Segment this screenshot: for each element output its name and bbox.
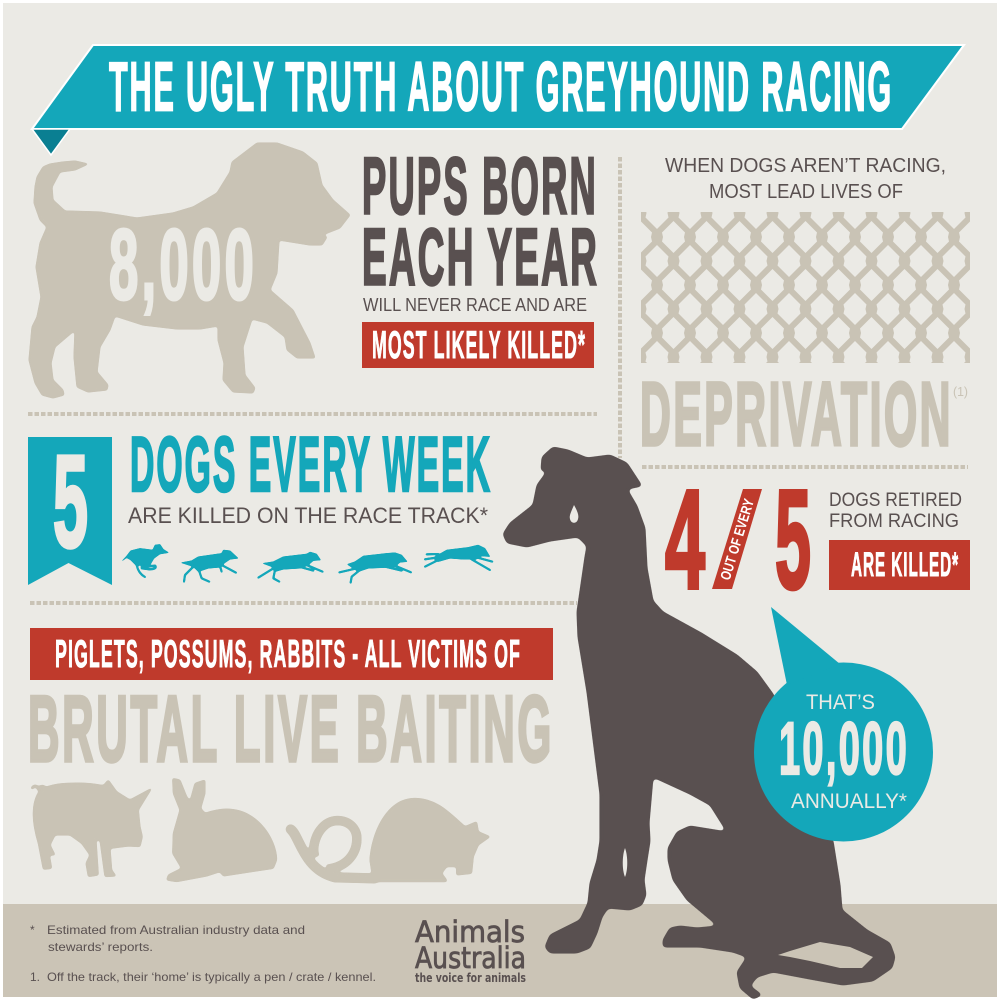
statistic: 4 out of every 5 xyxy=(665,460,811,618)
speech bubble: 10,000 annually: ANNUALLY* xyxy=(791,790,907,813)
icons: running greyhounds xyxy=(122,544,492,583)
text: DOGS EVERY WEEK xyxy=(130,420,492,508)
text: PUPS BORN xyxy=(362,142,598,232)
footnotes xyxy=(30,923,376,984)
statistic: 4 out of every 5: 4 xyxy=(665,460,705,618)
text: are killed on the race track: ARE KILLED ON THE RACE TRACK* xyxy=(128,503,488,528)
statistic: 4 out of every 5: OUT OF EVERY xyxy=(718,497,758,582)
footnotes: 1. xyxy=(30,970,40,984)
footnotes: Off the track, their ‘home’ is typically a pen / crate / kennel. xyxy=(47,970,376,984)
red label: are killed xyxy=(829,540,970,590)
red label: most likely killed xyxy=(362,322,594,368)
text: MOST LIKELY KILLED* xyxy=(372,324,586,367)
title banner xyxy=(32,45,964,155)
text: dogs retired from racing: FROM RACING xyxy=(829,511,959,532)
logo: Animals Australia: Australia xyxy=(415,941,526,975)
speech bubble: 10,000 annually: THAT’S xyxy=(806,691,875,714)
logo: Animals Australia: Animals xyxy=(415,915,525,949)
logo: Animals Australia xyxy=(415,915,526,985)
speech bubble: 10,000 annually xyxy=(754,607,933,842)
number 8,000: 8,000 xyxy=(109,209,257,321)
text: EACH YEAR xyxy=(362,212,599,302)
logo: Animals Australia: the voice for animals xyxy=(415,971,526,985)
icon: tear xyxy=(570,505,578,523)
text: when dogs aren't racing xyxy=(665,155,946,203)
text: will never race: WILL NEVER RACE AND ARE xyxy=(363,295,587,315)
icons: pig, rabbit, possum xyxy=(32,778,490,882)
footnotes: Estimated from Australian industry data and xyxy=(47,923,305,937)
text: dogs retired from racing xyxy=(829,490,962,532)
ribbon: 5 xyxy=(28,428,112,585)
ribbon: 5: 5 xyxy=(53,428,88,574)
heading: pups born each year xyxy=(362,142,599,302)
puppy silhouette with 8,000 xyxy=(29,143,350,398)
text: when dogs aren't racing: MOST LEAD LIVES OF xyxy=(709,181,903,203)
ground band xyxy=(3,904,997,997)
dotted dividers xyxy=(28,157,968,603)
text: dogs retired from racing: DOGS RETIRED xyxy=(829,490,962,511)
footnotes: * xyxy=(30,923,35,937)
text: 5 xyxy=(775,460,811,618)
icon: chain-link fence xyxy=(641,212,970,363)
text: when dogs aren't racing: WHEN DOGS AREN’T RACING, xyxy=(665,155,946,177)
footnotes: stewards’ reports. xyxy=(48,940,153,954)
red label: all victims of xyxy=(30,628,553,680)
heading: deprivation: (1) xyxy=(953,384,968,399)
greyhound silhouette xyxy=(503,447,895,999)
